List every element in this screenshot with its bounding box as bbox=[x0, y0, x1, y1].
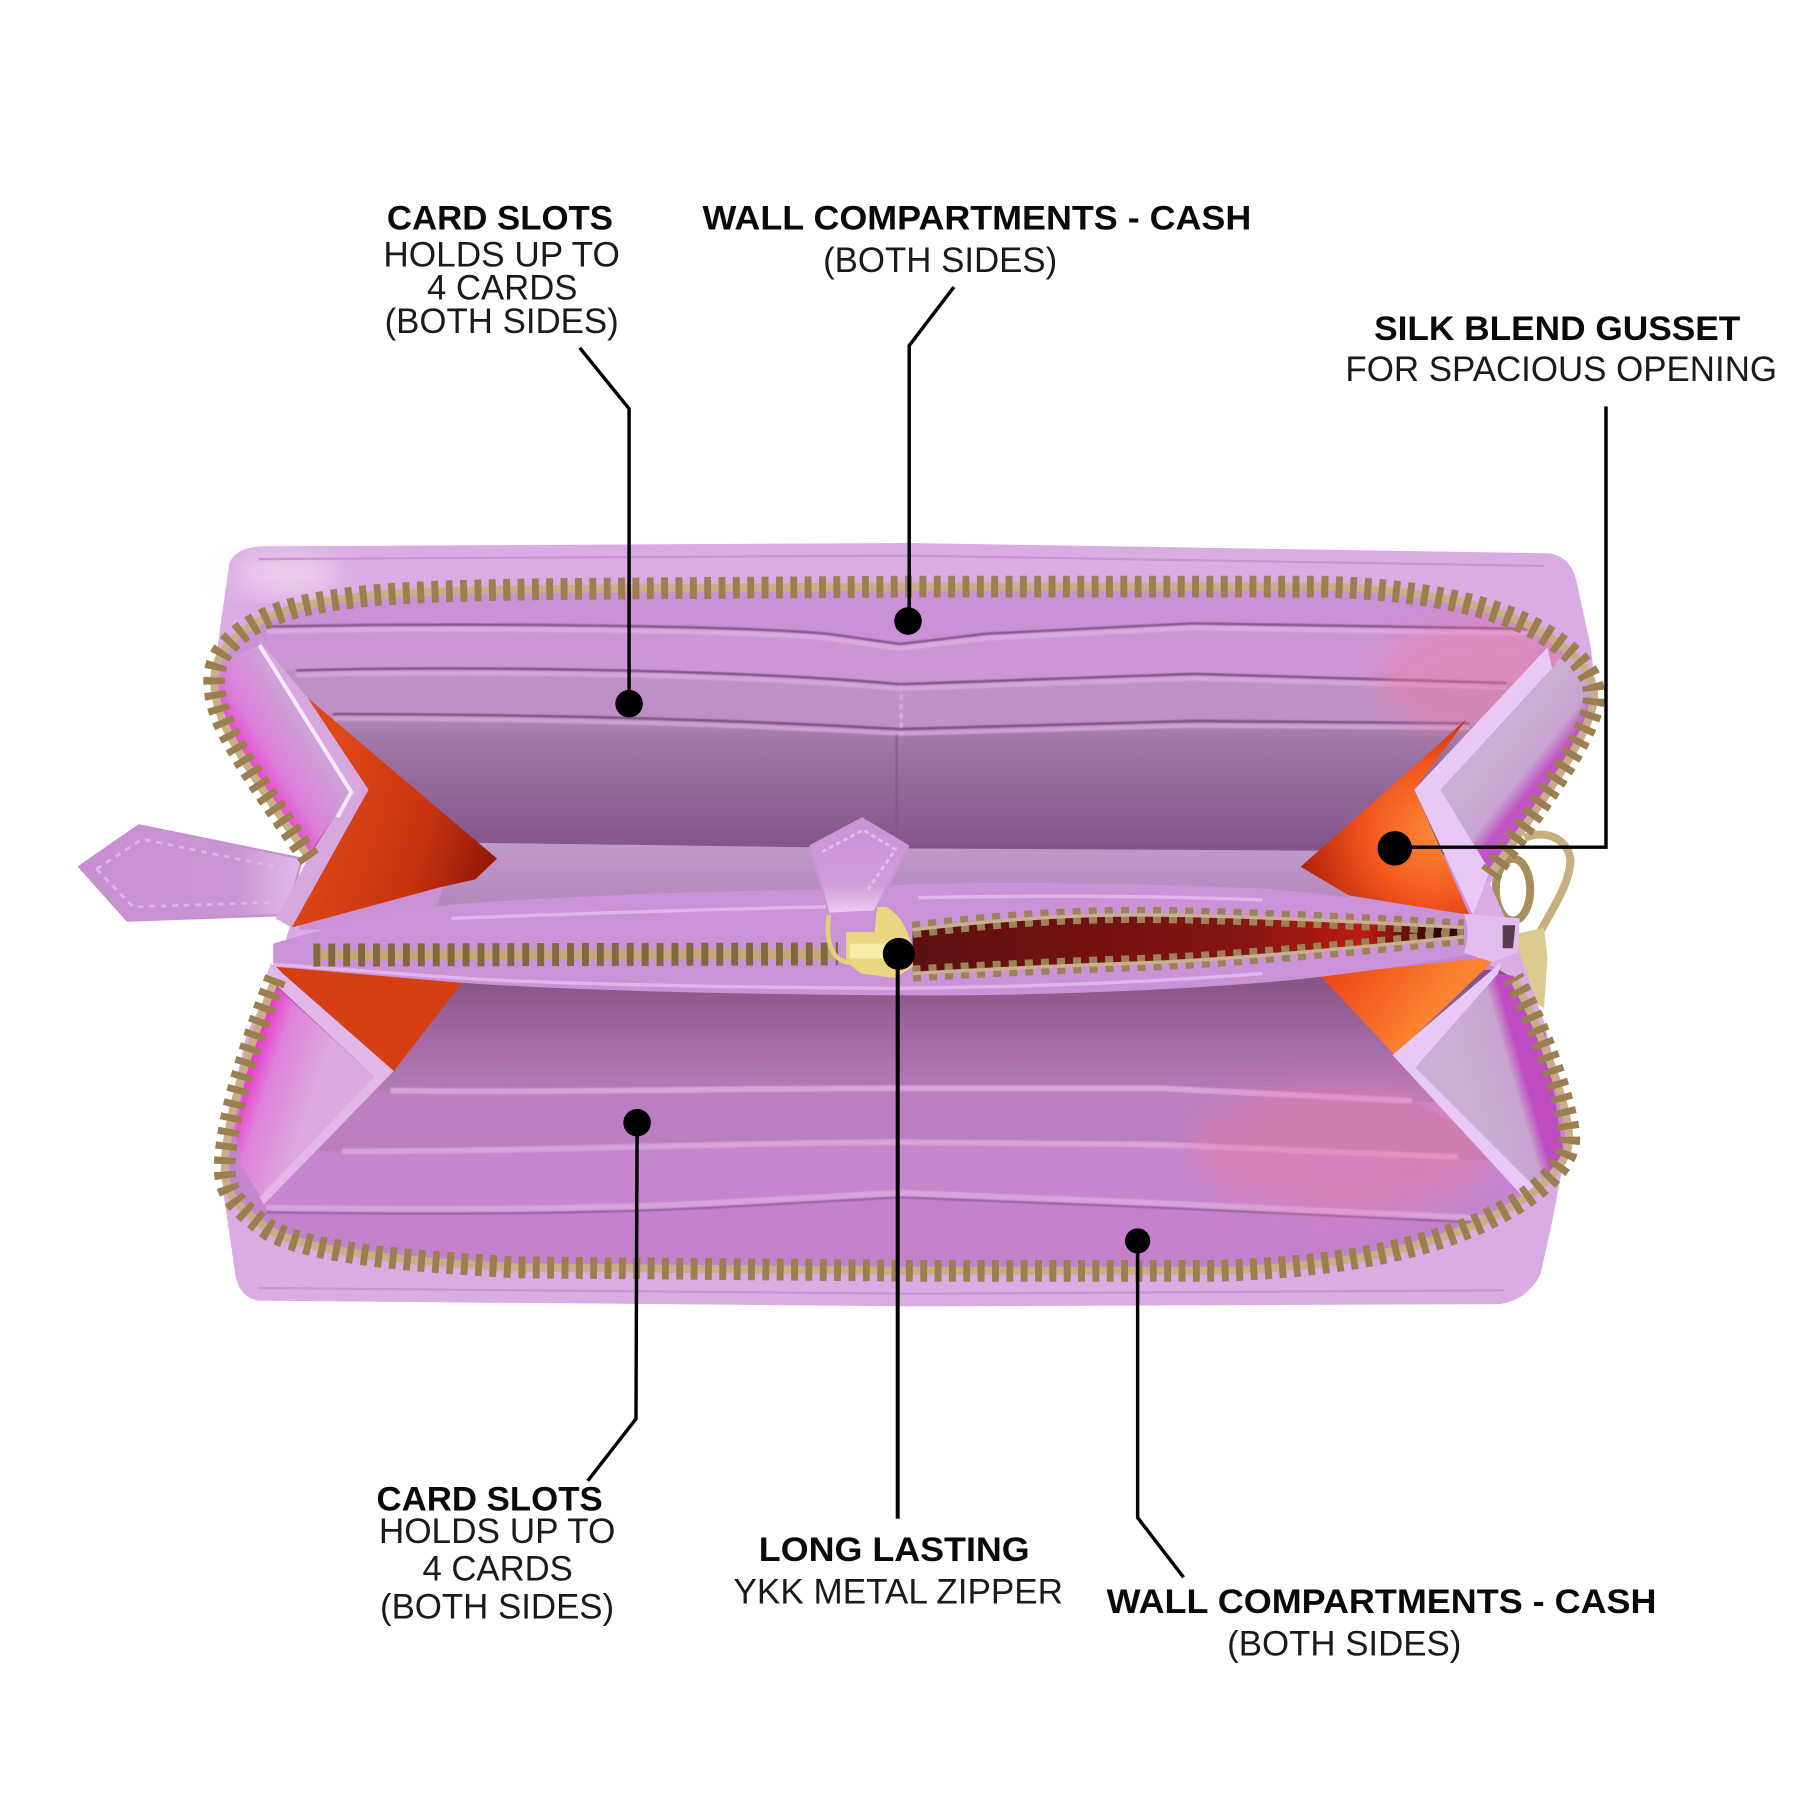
leader line and dot bbox=[580, 348, 643, 717]
heading: long lasting: LONG LASTING bbox=[759, 1531, 1030, 1569]
gusset: orange top left bbox=[292, 698, 497, 928]
zipper pull: gold slider bbox=[828, 907, 913, 978]
large pocket bottom bbox=[264, 970, 1527, 1102]
text: 4 cards: 4 CARDS bbox=[427, 268, 577, 308]
callout: silk blend gusset bbox=[1345, 310, 1777, 866]
leader line and dot bbox=[894, 287, 954, 635]
heading: wall compartments: WALL COMPARTMENTS - CASH bbox=[703, 200, 1251, 238]
zip pocket front panel bbox=[273, 883, 1506, 995]
shell stitch lines bbox=[258, 556, 1544, 1294]
interior top lining bbox=[218, 590, 1564, 930]
text: holds up to: HOLDS UP TO bbox=[383, 234, 620, 274]
leader line and dot bbox=[1378, 406, 1606, 866]
zipper pocket back band bbox=[436, 843, 1355, 907]
heading: silk blend gusset: SILK BLEND GUSSET bbox=[1374, 310, 1740, 348]
text: 4 cards: 4 CARDS bbox=[422, 1549, 573, 1589]
flap: bottom right bbox=[1392, 962, 1564, 1201]
flap: bottom left bbox=[235, 963, 394, 1204]
gusset: orange bottom right bbox=[1320, 956, 1498, 1055]
heading: card slots: CARD SLOTS bbox=[387, 200, 613, 238]
card slot row 1 top bbox=[285, 670, 1514, 728]
card slot row 2 bottom bbox=[308, 1146, 1212, 1160]
text: both sides: (BOTH SIDES) bbox=[823, 240, 1057, 280]
wall compartment bottom bbox=[266, 1193, 1515, 1274]
right side blush top bbox=[1378, 620, 1584, 735]
text: both sides: (BOTH SIDES) bbox=[380, 1587, 614, 1627]
text: for spacious opening: FOR SPACIOUS OPENING bbox=[1345, 349, 1777, 389]
leader line and dot bbox=[588, 1109, 651, 1481]
callout: metal zipper bbox=[734, 938, 1063, 1612]
right side blush bottom bbox=[1194, 1085, 1492, 1211]
inner zipper right rows bbox=[913, 915, 1464, 973]
highlight on the corners bbox=[235, 556, 339, 592]
text: ykk metal zipper: YKK METAL ZIPPER bbox=[734, 1572, 1063, 1612]
gusset: orange top right bbox=[1301, 719, 1469, 915]
outer zipper top bbox=[214, 587, 1594, 875]
large pocket top bbox=[276, 714, 1515, 855]
text: holds up to: HOLDS UP TO bbox=[379, 1511, 615, 1551]
callout: wall compartments bottom bbox=[1107, 1228, 1657, 1663]
center junction on right bbox=[1464, 914, 1520, 962]
lower edges bbox=[266, 1088, 1504, 1224]
outer zipper bottom bbox=[225, 978, 1569, 1271]
leader line and dot bbox=[883, 938, 915, 1519]
hardware: gold clasp and ring bbox=[1496, 834, 1570, 1008]
interior bottom lining bbox=[228, 954, 1566, 1267]
card slot row 1 bottom bbox=[264, 1088, 1527, 1159]
leader line and dot bbox=[1125, 1228, 1184, 1577]
gusset: orange bottom left bbox=[276, 967, 465, 1071]
callout: card slots top bbox=[383, 200, 643, 717]
flap: top right bbox=[1414, 647, 1593, 915]
callout: card slots bottom bbox=[377, 1109, 651, 1627]
pull tab: left strap bbox=[79, 825, 302, 921]
wall compartment top bbox=[266, 623, 1538, 804]
inner zipper opening bbox=[913, 915, 1464, 973]
slot edges bbox=[266, 622, 1538, 818]
heading: card slots: CARD SLOTS bbox=[377, 1481, 603, 1519]
callout: wall compartments top bbox=[703, 200, 1251, 635]
text: both sides: (BOTH SIDES) bbox=[1227, 1623, 1461, 1663]
flap: top left bbox=[215, 641, 368, 928]
wallet infographic bbox=[78, 206, 1774, 1663]
inner zipper left bbox=[313, 954, 838, 955]
heading: wall compartments: WALL COMPARTMENTS - CASH bbox=[1107, 1583, 1657, 1621]
wallet photo illustration bbox=[79, 543, 1607, 1306]
zipper pull: leather tab bbox=[810, 818, 908, 914]
wallet outer shell bbox=[212, 543, 1596, 1306]
text: both sides: (BOTH SIDES) bbox=[385, 301, 619, 341]
